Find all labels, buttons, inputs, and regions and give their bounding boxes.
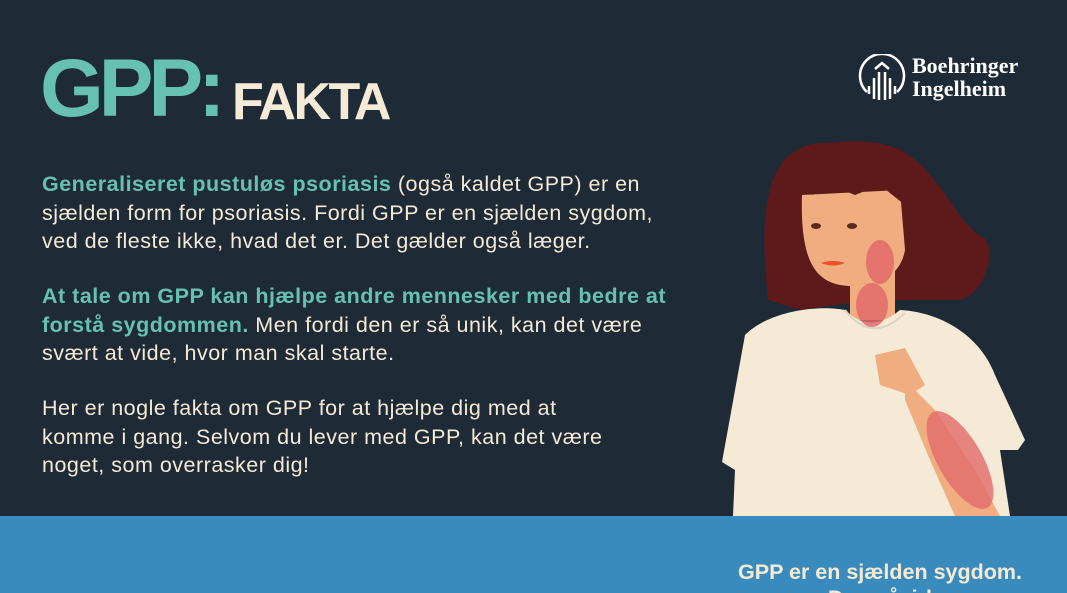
text block: paragraph 3: noget, som overrasker dig! [42, 453, 310, 477]
text block: paragraph 3: komme i gang. Selvom du lever med GPP, kan det være [42, 424, 602, 448]
logo: Boehringer Ingelheim: Ingelheim [912, 76, 1006, 101]
logo: Boehringer Ingelheim: Boehringer [912, 53, 1018, 78]
bottom band [0, 516, 1067, 593]
callout text: GPP er en sjælden sygdom. [738, 560, 1022, 584]
text block: paragraph 1: Generaliseret pustuløs psoriasis (også kaldet GPP) er en [42, 172, 640, 196]
text block: paragraph 1 [42, 172, 653, 253]
title [40, 43, 390, 134]
text block: paragraph 2: svært at vide, hvor man skal starte. [42, 341, 395, 365]
text block: paragraph 2: At tale om GPP kan hjælpe andre mennesker med bedre at [42, 284, 666, 308]
text block: paragraph 1: sjælden form for psoriasis. Fordi GPP er en sjælden sygdom, [42, 200, 653, 224]
text block: paragraph 3 [42, 396, 602, 477]
illustration: woman with GPP [722, 141, 1025, 516]
title: GPP: GPP: [40, 43, 220, 134]
text block: paragraph 3: Her er nogle fakta om GPP for at hjælpe dig med at [42, 396, 557, 420]
logo: Boehringer Ingelheim [858, 53, 1018, 101]
title: FAKTA: FAKTA [232, 73, 389, 131]
text block: paragraph 2 [42, 284, 666, 365]
text block: paragraph 2: forstå sygdommen. Men fordi den er så unik, kan det være [42, 312, 642, 336]
text block: paragraph 1: ved de fleste ikke, hvad det er. Det gælder også læger. [42, 229, 591, 253]
